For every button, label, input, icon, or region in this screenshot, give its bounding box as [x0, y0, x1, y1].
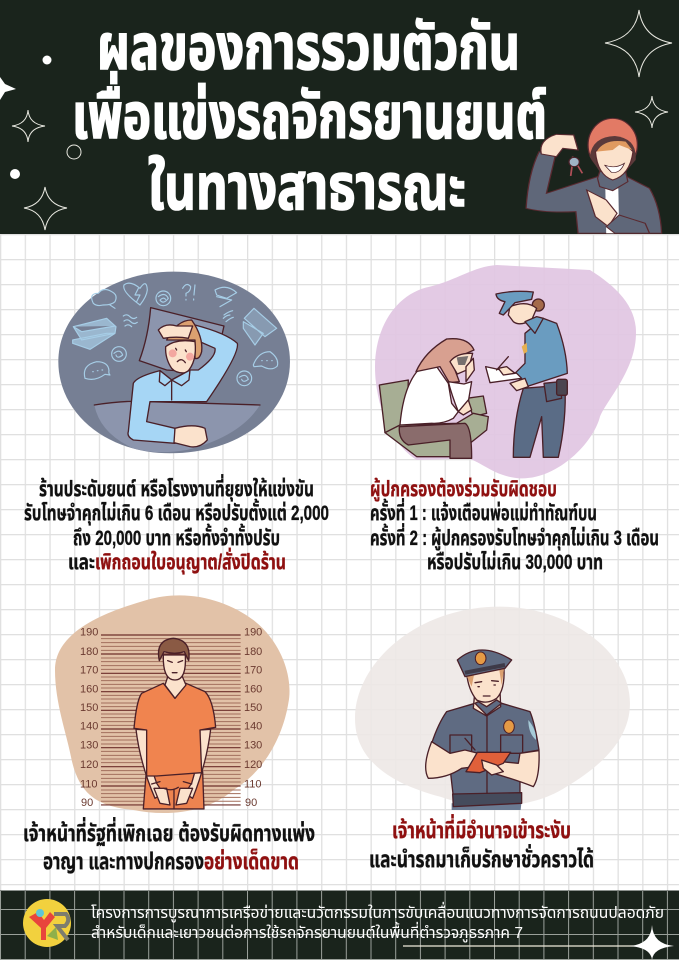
height labels: 180 [244, 646, 262, 658]
height labels: 110 [80, 778, 98, 790]
text: officer authority: และนำรถมาเก็บรักษาชั่วคราวได้ [369, 844, 594, 872]
text: officer authority [369, 814, 594, 872]
icon: project logo [23, 899, 71, 947]
height labels: 90 [245, 797, 257, 809]
height labels: 110 [244, 778, 261, 790]
height labels: 190 [244, 627, 262, 639]
icon: rider holding keys [526, 118, 662, 233]
height labels: 190 [80, 627, 98, 639]
text: officer authority: เจ้าหน้าที่มีอำนาจเข้าระงับ [392, 814, 571, 843]
height labels: 150 [244, 702, 262, 714]
height labels: 120 [80, 759, 98, 771]
text: guardian responsibility: ผู้ปกครองต้องร่วมรับผิดชอบ [370, 478, 557, 502]
decorative stars [0, 10, 672, 230]
illustration: officer and distressed parent [375, 265, 636, 478]
text: guardian responsibility: หรือปรับไม่เกิน 30,000 บาท [427, 551, 603, 574]
height labels: 170 [244, 665, 262, 677]
text: negligent officials: อาญา และทางปกครอง [43, 848, 204, 874]
height labels: 140 [80, 721, 98, 733]
text: shop penalty: รับโทษจำคุกไม่เกิน 6 เดือน หรือปรับตั้งแต่ 2,000 [24, 499, 329, 526]
title: ในทางสาธารณะ [148, 151, 466, 223]
illustration: worried man in bed [58, 272, 290, 453]
height labels: 160 [80, 683, 98, 695]
text: shop penalty [24, 474, 329, 575]
height labels: 130 [244, 739, 262, 751]
text: guardian responsibility [370, 478, 659, 574]
text: negligent officials [23, 817, 315, 874]
header band [0, 0, 679, 234]
text: shop penalty: ร้านประดับยนต์ หรือโรงงานที่ยุยงให้แข่งขัน [39, 474, 314, 502]
illustration: officer with clipboard [355, 607, 630, 810]
height labels [80, 627, 262, 809]
footer text: สำหรับเด็กและเยาวชนต่อการใช้รถจักรยานยนต์ในพื้นที่ตำรวจภูธรภาค 7 [91, 921, 523, 942]
panel: negligent officials [23, 595, 315, 874]
title: ผลของการรวมตัวกัน [97, 11, 520, 83]
height labels: 90 [81, 797, 93, 809]
text: shop penalty: และ [68, 551, 95, 574]
panel: officer authority [355, 607, 630, 872]
title [72, 11, 547, 223]
sparkle with line [403, 925, 674, 960]
text: shop penalty: ถึง 20,000 บาท หรือทั้งจำทั้งปรับ [73, 524, 280, 550]
text: negligent officials: อย่างเด็ดขาด [204, 848, 299, 874]
panel: guardian responsibility [370, 265, 659, 574]
footer text: โครงการการบูรณาการเครือข่ายและนวัตกรรมในการขับเคลื่อนแนวทางการจัดการถนนปลอดภัย [91, 901, 664, 922]
panel: shop penalty [24, 272, 329, 575]
height labels: 130 [80, 739, 98, 751]
text: shop penalty: เพิกถอนใบอนุญาต/สั่งปิดร้าน [95, 548, 286, 575]
doodles [73, 283, 278, 386]
height labels: 120 [244, 759, 262, 771]
height labels: 160 [244, 683, 262, 695]
height labels: 150 [80, 702, 98, 714]
height labels: 170 [80, 665, 98, 677]
footer band [0, 890, 679, 960]
height labels: 140 [244, 721, 262, 733]
illustration: prisoner with height chart [55, 595, 290, 813]
height labels: 180 [80, 646, 98, 658]
footer text [91, 901, 664, 942]
text: negligent officials: เจ้าหน้าที่รัฐที่เพิกเฉย ต้องรับผิดทางแพ่ง [23, 817, 315, 846]
